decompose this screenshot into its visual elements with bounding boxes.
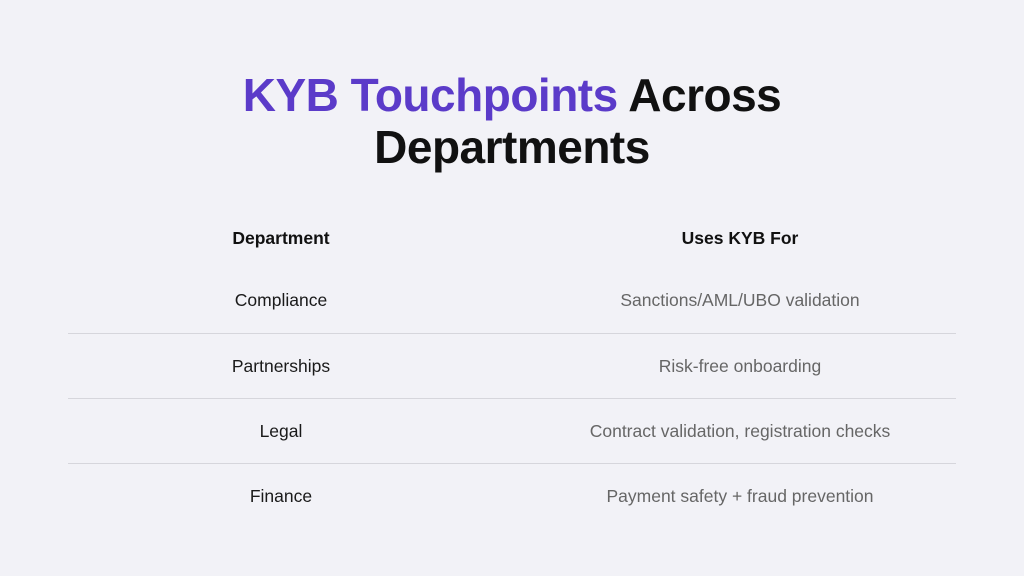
header: department: Department	[232, 228, 330, 248]
row: partnerships uses: Risk-free onboarding	[659, 356, 821, 376]
row: finance uses: Payment safety + fraud prevention	[606, 486, 874, 506]
row: legal: Legal	[260, 421, 302, 441]
header: uses: Uses KYB For	[682, 228, 798, 248]
row: compliance: Compliance	[235, 290, 327, 310]
row: legal uses: Contract validation, registration checks	[590, 421, 890, 441]
row: compliance uses: Sanctions/AML/UBO validation	[620, 290, 860, 310]
title: KYB Touchpoints Across	[243, 69, 781, 121]
title	[243, 69, 781, 173]
title: Departments	[374, 121, 650, 173]
row: partnerships: Partnerships	[232, 356, 330, 376]
row: finance: Finance	[250, 486, 312, 506]
